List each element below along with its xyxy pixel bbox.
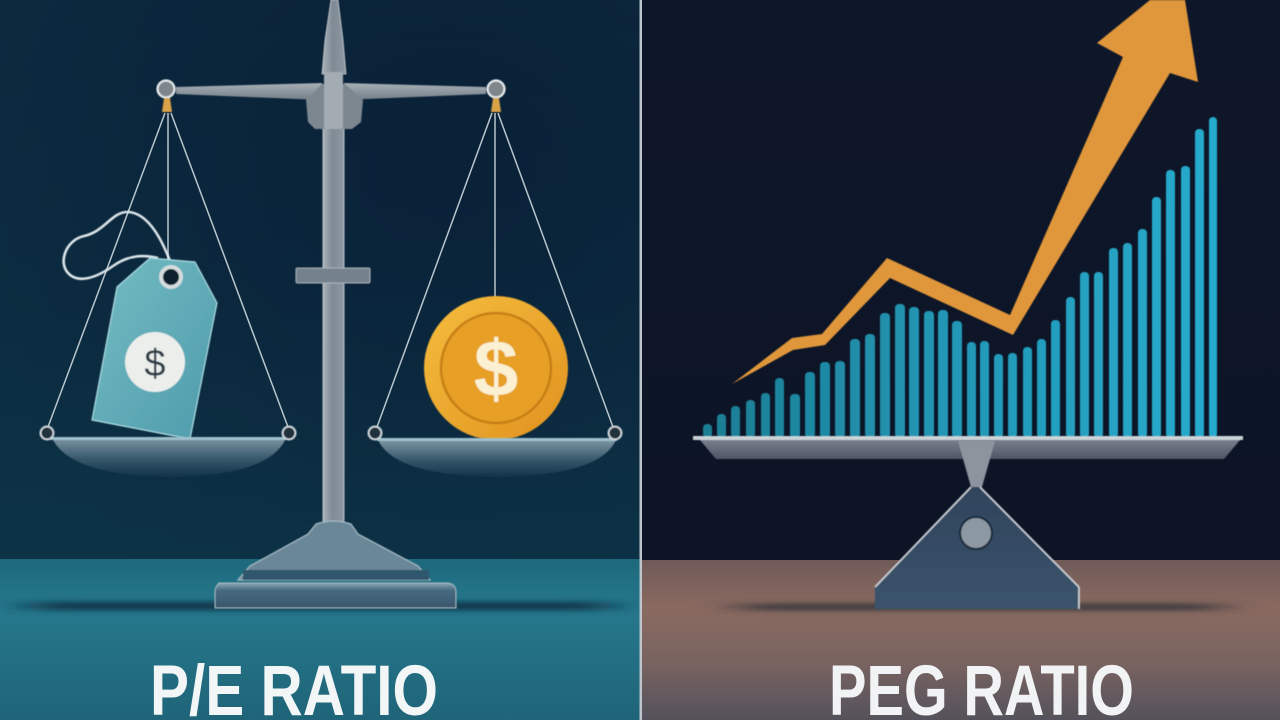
icon: balance scale — [158, 0, 504, 608]
icon: gold coin: $ — [474, 324, 518, 413]
scale beam — [176, 72, 486, 129]
balance beam — [693, 436, 1243, 459]
tag hole — [161, 267, 181, 287]
divider — [640, 0, 642, 720]
panel: P/E ratio background — [0, 0, 640, 720]
scale crossbar — [296, 268, 370, 283]
right pan strings — [377, 113, 613, 427]
dollar badge — [125, 332, 185, 392]
bar chart — [703, 117, 1217, 438]
scale base — [215, 521, 456, 608]
left pan — [40, 426, 296, 477]
scale post — [323, 128, 344, 528]
right hanger — [488, 80, 504, 112]
dollar badge: $ — [144, 343, 166, 385]
tag body — [92, 258, 217, 439]
panel: PEG ratio background — [642, 0, 1280, 720]
left pan strings — [48, 113, 288, 427]
left hanger — [158, 80, 174, 112]
icon: gold coin — [424, 296, 568, 440]
scale spire — [322, 0, 346, 74]
arrow: rising growth line — [732, 0, 1198, 384]
icon: fulcrum — [875, 441, 1079, 609]
icon: price tag — [64, 212, 217, 439]
right pan — [368, 426, 622, 477]
tag string — [64, 212, 170, 279]
